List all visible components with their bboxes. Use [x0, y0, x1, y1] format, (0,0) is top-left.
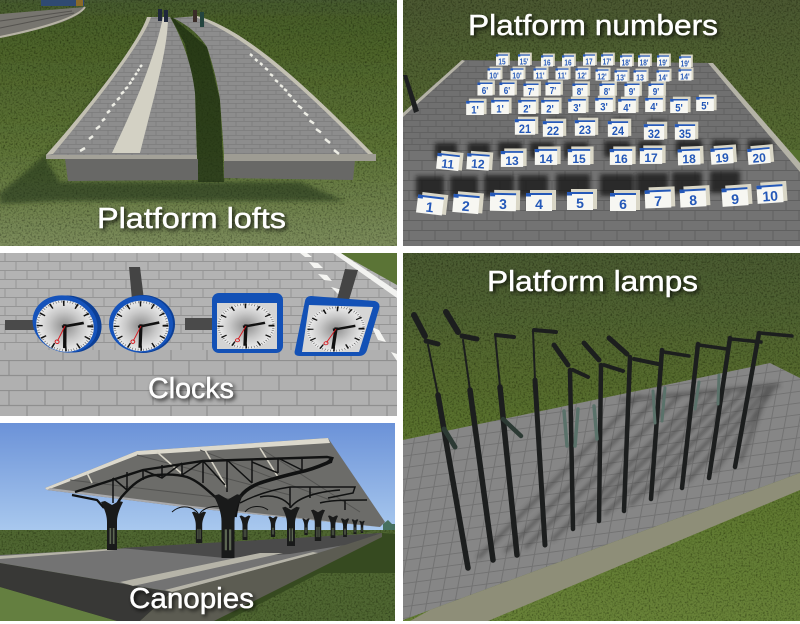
- signs row 2: 11': [557, 71, 567, 81]
- panel: clocks: [0, 253, 397, 416]
- signs row 7: 4: [535, 196, 543, 212]
- lamp post fragment: [403, 75, 419, 113]
- signs row 7: 9: [731, 191, 740, 207]
- panel: platform lofts: [0, 0, 397, 246]
- grass corner and platform edge: [300, 253, 397, 361]
- panel: platform lamps: [403, 253, 800, 621]
- canopy columns: [101, 494, 365, 558]
- paved platform: [403, 60, 800, 246]
- signs row 2: 12': [597, 72, 607, 82]
- signs row 1: 15': [520, 56, 528, 67]
- lamp 3: [495, 334, 521, 555]
- grass background: [403, 0, 800, 246]
- signs row 5: 35: [679, 129, 692, 141]
- signs row 4: 2': [546, 104, 554, 116]
- lamp shadows: [478, 384, 780, 558]
- signs row 5: 24: [612, 126, 625, 138]
- signs row 4: 4': [650, 102, 658, 114]
- ground shadow: [0, 22, 345, 204]
- people: [158, 9, 204, 27]
- signs row 5: 21: [519, 124, 532, 136]
- heading: canopies: Canopies: [129, 583, 254, 615]
- lamp 4: [533, 330, 556, 545]
- signs row 7: 5: [576, 195, 584, 211]
- signs row 4: 3': [600, 102, 608, 114]
- distant trees: [383, 520, 395, 531]
- signs row 2: 14': [658, 73, 668, 83]
- lamp 5: [554, 345, 588, 529]
- signs row 1: 16: [543, 57, 551, 68]
- signs row 6: 13: [505, 154, 519, 168]
- signs row 2: 10': [512, 71, 522, 81]
- signs row 4: 1': [471, 105, 479, 117]
- signs row 6: 17: [644, 151, 658, 165]
- signs row 2: 13: [636, 73, 644, 83]
- signs row 7: 2: [461, 198, 471, 214]
- signs row 4: 3': [573, 103, 581, 115]
- signs row 1: [496, 53, 693, 69]
- signs row 4: 1': [496, 104, 504, 116]
- signs row 5: 22: [547, 126, 559, 138]
- lamp 7: [609, 338, 658, 511]
- signs row 1: 18': [622, 57, 630, 68]
- platform front face: [410, 473, 800, 621]
- clock 3: square, side bracket: [185, 293, 283, 353]
- clock 1: round, side bracket: [5, 286, 110, 365]
- signs row 7: 10: [762, 187, 779, 205]
- signs row 6: 14: [539, 152, 553, 166]
- grass: [0, 530, 395, 621]
- lamp 1: [414, 315, 468, 568]
- signs row 2: 12': [577, 71, 587, 81]
- signs row 7: 3: [499, 196, 507, 212]
- signs row 5: 23: [579, 125, 591, 137]
- signs row 6: 12: [471, 157, 485, 172]
- tactile strips: [0, 549, 318, 592]
- heading: clocks: Clocks: [148, 373, 234, 405]
- signs row 1: 17: [585, 56, 593, 67]
- signs row 4: 4': [623, 103, 631, 115]
- lamp 9: [682, 344, 727, 488]
- signs row 6: 20: [752, 150, 767, 166]
- signs row 4: 2': [523, 104, 531, 116]
- canopy trusses: [72, 457, 367, 517]
- distant tracks: [0, 0, 85, 38]
- signs row 7: 8: [689, 192, 698, 208]
- left platform: [46, 17, 198, 181]
- signs row 1: 19': [681, 58, 689, 69]
- signs row 1: 16: [564, 57, 572, 68]
- signs row 2: 13': [616, 73, 626, 83]
- signs row 3: 6': [482, 85, 488, 96]
- signs row 6: 19: [715, 151, 730, 166]
- signs row 3: 7': [550, 85, 556, 96]
- signs row 4: [466, 95, 717, 117]
- signs row 1: 15: [498, 56, 506, 67]
- signs row 3: 8': [577, 86, 583, 97]
- signs row 7: 1: [425, 199, 435, 215]
- grass background: [0, 0, 397, 246]
- signs row 2: 10': [489, 71, 499, 81]
- heading: platform lamps: Platform lamps: [487, 266, 698, 298]
- sky: [0, 423, 395, 530]
- sign shadows: [416, 116, 772, 198]
- heading: platform lofts: Platform lofts: [97, 203, 286, 235]
- signs row 6: [436, 144, 774, 173]
- signs row 1: 17': [603, 56, 611, 67]
- signs row 5: [515, 117, 698, 141]
- panel: platform numbers: [403, 0, 800, 246]
- lamp 6: [584, 343, 623, 521]
- lamp 8: [651, 350, 689, 499]
- signs row 5: 32: [648, 129, 660, 141]
- lamp 10: [709, 338, 761, 478]
- platform side faces: [0, 533, 382, 621]
- signs row 3: 6': [504, 85, 510, 96]
- signs row 7: 7: [654, 193, 662, 209]
- lamp 11: [735, 333, 792, 467]
- signs row 3: 9': [653, 86, 659, 97]
- signs row 3: 7': [528, 86, 534, 97]
- signs row 2: 11': [535, 71, 545, 81]
- grass background: [403, 253, 800, 621]
- signs row 6: 16: [614, 152, 628, 166]
- signs row 6: 18: [682, 152, 696, 166]
- clock 2: round, top bracket: [109, 267, 175, 353]
- signs row 6: 15: [572, 152, 586, 166]
- panel: canopies: [0, 423, 395, 621]
- right platform: [173, 16, 376, 180]
- signs row 4: 5': [675, 103, 683, 115]
- signs row 3: 8': [604, 86, 610, 97]
- signs row 2: 14': [680, 72, 690, 82]
- signs row 1: 19': [659, 57, 667, 68]
- signs row 7: 6: [619, 196, 627, 212]
- signs row 6: 11: [441, 156, 455, 172]
- clock 4: square, top bracket: [295, 269, 380, 356]
- signs row 3: 9': [629, 86, 635, 97]
- lamp 2: [446, 312, 493, 560]
- signs row 4: 5': [701, 101, 709, 113]
- signs row 2: [488, 67, 694, 83]
- signs row 7: [416, 181, 788, 217]
- heading: platform numbers: Platform numbers: [468, 10, 718, 42]
- platform deck: [0, 533, 382, 592]
- paving: [0, 253, 397, 416]
- platform deck: [403, 363, 800, 620]
- signs row 1: 18': [640, 57, 648, 68]
- canopy roof: [45, 438, 385, 527]
- signs row 3: [477, 80, 666, 97]
